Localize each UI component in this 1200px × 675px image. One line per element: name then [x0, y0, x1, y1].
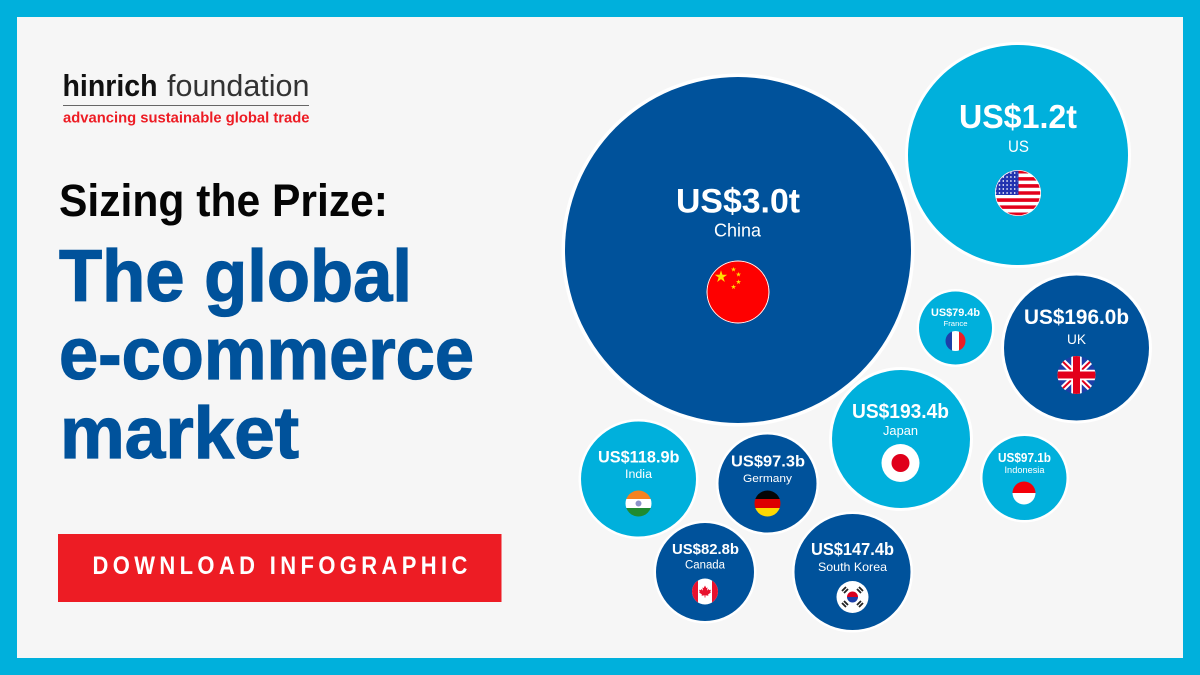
- bubble: South Korea: US$147.4b: [811, 539, 894, 559]
- bubble: China: China: [714, 220, 762, 240]
- title: The global e-commerce market: The global: [59, 236, 412, 317]
- bubble: India: US$118.9b: [598, 448, 680, 466]
- title: The global e-commerce market: market: [60, 393, 299, 474]
- logo: hinrich foundation: hinrich: [62, 68, 158, 103]
- icon: UK flag: [1057, 355, 1096, 395]
- bubble: UK: US$196.0b: [1024, 306, 1129, 329]
- bubble: France: [916, 289, 994, 367]
- heading: Sizing the Prize: Sizing the Prize:: [59, 175, 388, 226]
- bubble: Canada: Canada: [685, 560, 726, 572]
- icon: France flag: [945, 331, 966, 351]
- logo: hinrich foundation: foundation: [167, 68, 310, 103]
- icon: Japan flag: [882, 444, 920, 482]
- bubble: Canada: [654, 520, 756, 624]
- logo: hinrich foundation: [62, 68, 310, 126]
- bubble: India: [578, 419, 698, 539]
- bubble: Canada: US$82.8b: [672, 542, 739, 558]
- button: download infographic: [58, 534, 502, 602]
- icon: Canada flag: [692, 578, 718, 605]
- bubble: US: US: [1008, 137, 1029, 156]
- logo: hinrich foundation: advancing sustainable global trade: [63, 110, 310, 126]
- bubble: China: [562, 74, 914, 426]
- bubble: UK: [1001, 272, 1152, 424]
- bubble: Germany: US$97.3b: [731, 454, 805, 470]
- icon: India flag: [625, 490, 652, 517]
- bubble: Japan: Japan: [883, 423, 918, 438]
- bubble: Japan: [829, 367, 973, 511]
- title: The global e-commerce market: e-commerce: [59, 314, 474, 395]
- bubble: India: India: [625, 469, 653, 481]
- bubble: Indonesia: [980, 434, 1069, 522]
- bubble: Germany: [716, 432, 819, 535]
- icon: Indonesia flag: [1012, 481, 1036, 505]
- bubble: UK: UK: [1067, 331, 1087, 347]
- bubble: South Korea: [792, 512, 913, 632]
- bubble: South Korea: South Korea: [818, 560, 887, 574]
- bubble: Germany: Germany: [743, 473, 793, 485]
- bubble: Indonesia: Indonesia: [1004, 465, 1044, 475]
- bubble: US: [905, 42, 1131, 268]
- bubble: France: US$79.4b: [931, 307, 980, 319]
- bubble: France: France: [944, 319, 968, 328]
- title: The global e-commerce market: [59, 236, 474, 474]
- icon: Germany flag: [754, 490, 781, 517]
- icon: China flag: [706, 260, 770, 324]
- bubble: China: US$3.0t: [676, 182, 800, 220]
- bubble: US: US$1.2t: [959, 98, 1077, 135]
- bubble: Indonesia: US$97.1b: [998, 451, 1051, 465]
- button: download infographic: DOWNLOAD INFOGRAPHIC: [92, 552, 467, 579]
- bubble: Japan: US$193.4b: [852, 401, 949, 423]
- icon: US flag: [995, 170, 1041, 216]
- icon: South Korea flag: [836, 581, 868, 613]
